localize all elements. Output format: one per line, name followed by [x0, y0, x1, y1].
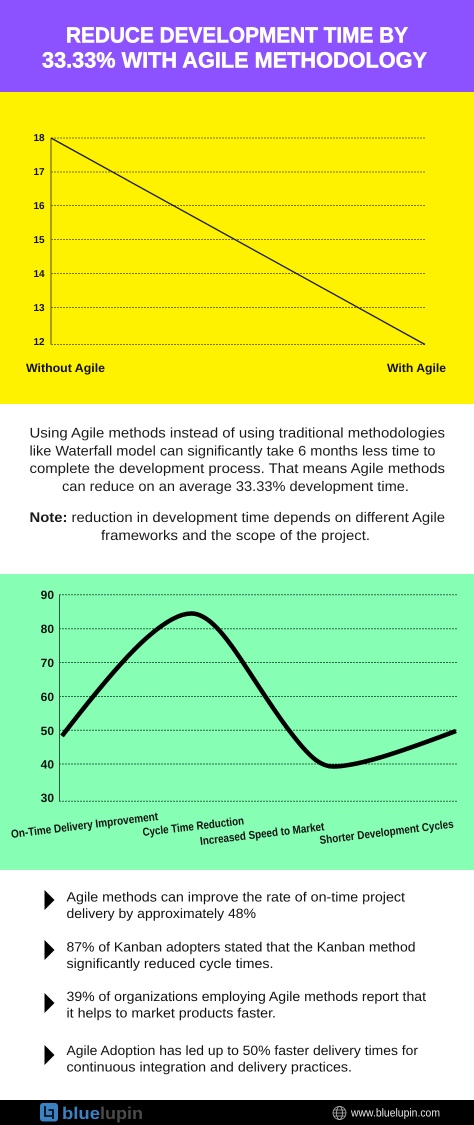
bullet 1: delivery by approximately 48% — [66, 906, 256, 921]
y axis labels: 40 — [41, 758, 54, 772]
icon: globe — [333, 1106, 346, 1120]
text block: note — [30, 509, 445, 543]
category labels: Cycle Time Reduction — [142, 815, 245, 839]
text block: explanation — [30, 424, 445, 494]
bullet 1 — [44, 890, 405, 921]
text block: explanation: like Waterfall model can significantly take 6 months less time to — [30, 442, 436, 458]
bullet 3 — [44, 989, 426, 1020]
logo: lupin — [100, 1104, 143, 1123]
text block: explanation: Using Agile methods instead of using traditional methodologies — [30, 424, 445, 440]
bullet 3: it helps to market products faster. — [66, 1006, 276, 1020]
bullet 1: Agile methods can improve the rate of on-time project — [66, 890, 405, 904]
y axis labels: 16 — [33, 201, 45, 212]
category labels: Increased Speed to Market — [199, 821, 325, 848]
smooth curve — [62, 613, 456, 767]
y axis labels: 90 — [41, 588, 54, 602]
x axis labels: Without Agile — [26, 361, 105, 375]
bullet 2: significantly reduced cycle times. — [66, 956, 274, 971]
title — [42, 22, 427, 72]
trend line — [51, 138, 425, 344]
bullet 2 — [44, 940, 416, 971]
y axis labels: 12 — [33, 337, 45, 348]
y axis labels: 15 — [33, 235, 45, 246]
title: 33.33% WITH AGILE METHODOLOGY — [42, 48, 427, 72]
y axis labels: 17 — [33, 167, 45, 178]
website: www.bluelupin.com — [350, 1108, 440, 1120]
y axis labels: 60 — [41, 690, 54, 704]
category labels: On-Time Delivery Improvement — [10, 811, 159, 841]
y axis labels: 18 — [33, 133, 45, 144]
panel: green line chart — [0, 574, 474, 870]
panel: bullet list — [44, 890, 426, 1074]
y axis labels: 50 — [41, 724, 54, 738]
y axis labels: 30 — [41, 791, 54, 805]
category labels — [10, 811, 454, 848]
y axis labels: 70 — [41, 656, 54, 670]
bullet 4 — [44, 1043, 419, 1074]
bullet 4: Agile Adoption has led up to 50% faster delivery times for — [66, 1043, 419, 1058]
y axis labels: 80 — [41, 622, 54, 636]
bullet 2: 87% of Kanban adopters stated that the Kanban method — [66, 940, 416, 954]
category labels: Shorter Development Cycles — [319, 819, 454, 847]
text block: explanation: complete the development process. That means Agile methods — [30, 460, 445, 476]
title: REDUCE DEVELOPMENT TIME BY — [66, 22, 408, 48]
x axis labels — [26, 361, 446, 375]
y axis labels — [41, 588, 54, 805]
x axis labels: With Agile — [387, 361, 446, 375]
logo — [40, 1103, 143, 1123]
bullet 4: continuous integration and delivery practices. — [66, 1060, 352, 1074]
y axis labels: 14 — [33, 269, 45, 280]
panel: yellow line chart — [0, 92, 474, 404]
text block: note: Note: reduction in development time depends on different Agile — [30, 509, 445, 525]
bullet 3: 39% of organizations employing Agile methods report that — [66, 989, 426, 1004]
footer bar — [0, 1100, 474, 1125]
panel: header — [0, 0, 474, 92]
y axis labels: 13 — [33, 303, 45, 314]
logo: blue — [62, 1104, 100, 1123]
text block: note: frameworks and the scope of the project. — [101, 527, 370, 543]
text block: explanation: can reduce on an average 33.33% development time. — [62, 478, 409, 494]
y axis labels — [33, 133, 45, 348]
